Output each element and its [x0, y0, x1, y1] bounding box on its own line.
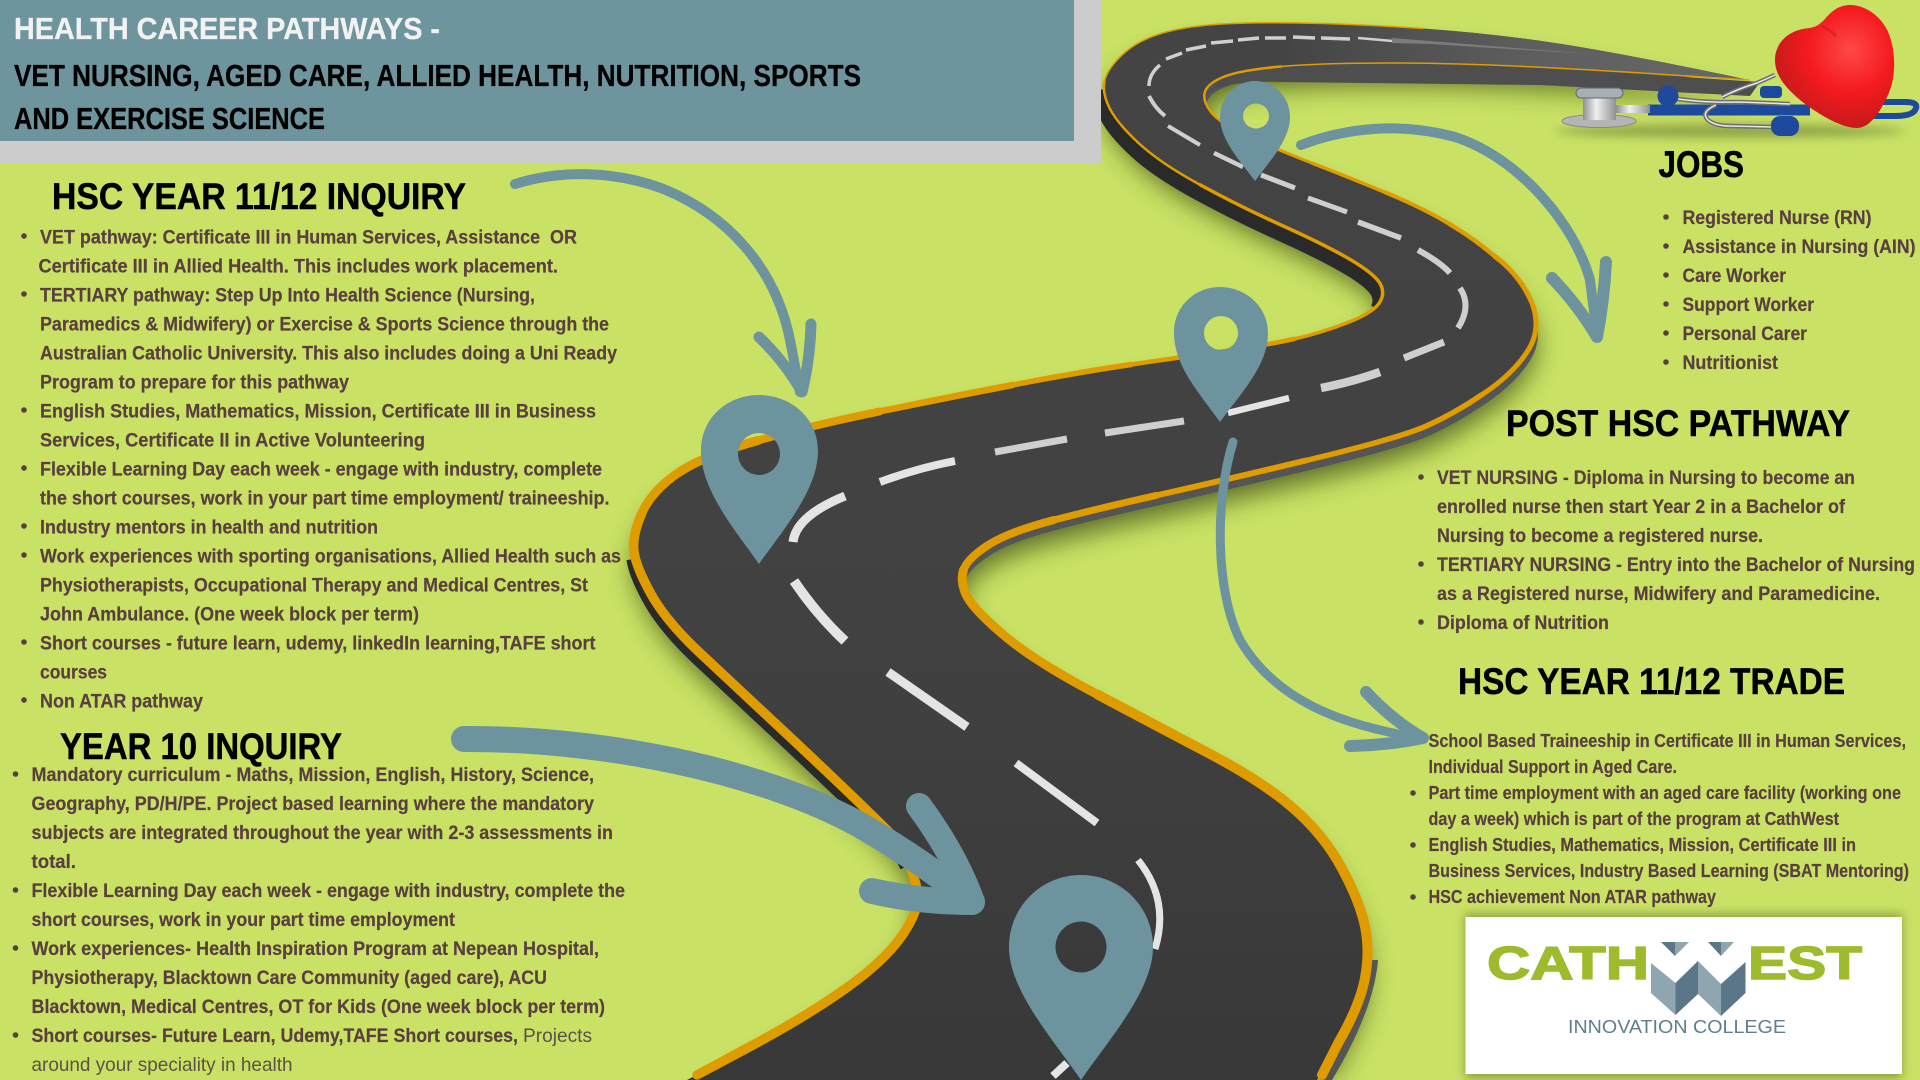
bullet text: Work experiences with sporting organisations, Allied Health such as	[40, 546, 621, 568]
CathWest logo	[1465, 914, 1902, 1078]
road surface	[634, 23, 1749, 1080]
location pin: top	[1220, 81, 1290, 181]
panel: year 10 inquiry	[13, 726, 625, 1076]
title line 3: AND EXERCISE SCIENCE	[14, 101, 325, 136]
bullet text: Services, Certificate II in Active Volunteering	[40, 430, 425, 452]
arrow: middle pin to trade	[1220, 442, 1423, 746]
bullet text: the short courses, work in your part time employment/ traineeship.	[40, 488, 610, 510]
bullet text: as a Registered nurse, Midwifery and Paramedicine.	[1437, 583, 1880, 605]
road tail lighter surface	[1281, 23, 1749, 80]
logo tagline: INNOVATION COLLEGE	[1568, 1017, 1786, 1037]
bullets	[1418, 474, 1424, 625]
panel: HSC year 11/12 trade	[1410, 661, 1909, 907]
header teal panel	[0, 0, 1074, 141]
location pin: middle	[1174, 287, 1268, 422]
bullets	[1663, 214, 1669, 365]
logo W mark	[1651, 942, 1746, 1016]
road left side wall	[631, 90, 1380, 868]
logo word CATH: CATH	[1487, 937, 1649, 989]
arrow: top pin to jobs	[1301, 128, 1606, 337]
logo card	[1466, 917, 1902, 1074]
bullet text: courses	[40, 662, 107, 684]
panel: jobs	[1658, 144, 1916, 374]
bullet text	[1428, 730, 1909, 907]
bullet text	[38, 226, 621, 712]
road centre dashes	[793, 37, 1590, 1076]
bullet text: short courses, work in your part time employment	[32, 909, 455, 931]
bullet text: Projects	[523, 1025, 592, 1047]
bullet text: Individual Support in Aged Care.	[1428, 756, 1677, 777]
bullets	[1410, 790, 1416, 900]
bullet text: VET NURSING - Diploma in Nursing to become an	[1437, 467, 1855, 489]
bullet text: HSC achievement Non ATAR pathway	[1428, 886, 1717, 907]
bullet text: around your speciality in health	[32, 1054, 292, 1076]
bullets	[13, 771, 18, 1038]
logo shadow	[1465, 914, 1902, 1078]
bullet text: Work experiences- Health Inspiration Program at Nepean Hospital,	[32, 938, 599, 960]
bullet text: Geography, PD/H/PE. Project based learning where the mandatory	[32, 793, 594, 815]
bullet text	[32, 764, 625, 1076]
job list: Personal Carer	[1682, 323, 1807, 345]
blue tube loop	[1870, 102, 1916, 116]
job list: Care Worker	[1682, 265, 1786, 287]
heading: POST HSC PATHWAY	[1506, 403, 1850, 444]
blue tube	[1648, 104, 1810, 116]
orange road edges	[634, 23, 1749, 1075]
bullets	[21, 233, 27, 703]
bullet text: English Studies, Mathematics, Mission, Certificate III in	[1428, 834, 1856, 855]
ear tips	[1658, 86, 1799, 136]
title line 2: VET NURSING, AGED CARE, ALLIED HEALTH, NUTRITION, SPORTS	[14, 58, 861, 93]
bullet text: subjects are integrated throughout the year with 2-3 assessments in	[32, 822, 613, 844]
bullet text: Industry mentors in health and nutrition	[40, 516, 378, 538]
bullet text: John Ambulance. (One week block per term)	[40, 604, 419, 626]
bullet text: Diploma of Nutrition	[1437, 612, 1609, 634]
image shadow	[1555, 125, 1905, 137]
bullet text: English Studies, Mathematics, Mission, Certificate III in Business	[40, 400, 596, 422]
bullet text	[1437, 467, 1915, 634]
road right side wall	[636, 33, 1751, 1080]
bullet text: total.	[32, 851, 76, 873]
job list: Registered Nurse (RN)	[1682, 207, 1872, 229]
stethoscope and heart image	[1555, 5, 1916, 137]
header grey backing	[0, 0, 1101, 163]
bullet text: Flexible Learning Day each week - engage with industry, complete the	[32, 880, 625, 902]
bullet text: Short courses- Future Learn, Udemy,TAFE Short courses,	[32, 1025, 518, 1047]
location pin: bottom	[1009, 875, 1153, 1080]
panel: HSC year 11/12 inquiry	[21, 176, 621, 712]
bullet text: enrolled nurse then start Year 2 in a Bachelor of	[1437, 496, 1845, 518]
heading: YEAR 10 INQUIRY	[60, 726, 342, 767]
road tail side wall	[1205, 63, 1760, 96]
winding road	[631, 23, 1760, 1080]
job list	[1682, 207, 1916, 374]
title line 1: HEALTH CAREER PATHWAYS -	[14, 11, 440, 46]
bullet text: TERTIARY pathway: Step Up Into Health Science (Nursing,	[40, 284, 535, 306]
bullet text: Flexible Learning Day each week - engage with industry, complete	[40, 458, 602, 480]
bullet text: Physiotherapy, Blacktown Care Community (aged care), ACU	[32, 967, 547, 989]
road shadow	[634, 45, 1749, 1078]
header banner	[0, 0, 1101, 163]
location pin: left	[701, 395, 818, 564]
bullet text: Program to prepare for this pathway	[40, 372, 349, 394]
bullet text: Non ATAR pathway	[40, 690, 203, 712]
heading: HSC YEAR 11/12 INQUIRY	[52, 176, 466, 217]
arrow: year 10 to bottom pin	[464, 739, 972, 902]
bullet text: Blacktown, Medical Centres, OT for Kids (One week block per term)	[32, 996, 605, 1018]
job list: Support Worker	[1682, 294, 1814, 316]
bullet text: Nursing to become a registered nurse.	[1437, 525, 1763, 547]
logo word EST: EST	[1748, 937, 1862, 989]
chest piece	[1562, 88, 1650, 128]
panel: post HSC pathway	[1418, 403, 1915, 634]
bullet text: VET pathway: Certificate III in Human Services, Assistance OR	[40, 226, 577, 248]
metal tubes	[1673, 75, 1790, 127]
heading: HSC YEAR 11/12 TRADE	[1458, 661, 1845, 702]
bullet text: day a week) which is part of the program at CathWest	[1428, 808, 1839, 829]
bullet text: Paramedics & Midwifery) or Exercise & Sports Science through the	[40, 314, 609, 336]
bullet text: Certificate III in Allied Health. This includes work placement.	[38, 256, 558, 278]
bullet text: Australian Catholic University. This also includes doing a Uni Ready	[40, 342, 617, 364]
red heart	[1775, 5, 1894, 128]
bullet text: Mandatory curriculum - Maths, Mission, English, History, Science,	[32, 764, 594, 786]
arrow: HSC inquiry to left pin	[515, 174, 811, 392]
bullet text: Short courses - future learn, udemy, linkedIn learning,TAFE short	[40, 632, 596, 654]
heading: JOBS	[1658, 144, 1744, 185]
bullet text: Physiotherapists, Occupational Therapy and Medical Centres, St	[40, 574, 588, 596]
job list: Nutritionist	[1682, 352, 1778, 374]
